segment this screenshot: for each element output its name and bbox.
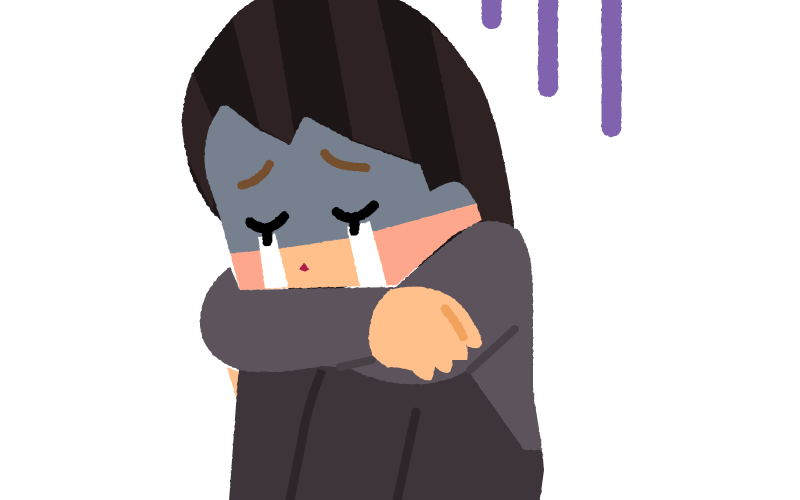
skin [230,203,482,290]
sweater fold [340,329,515,370]
illustration: crying woman hugging her knees [182,0,622,500]
eyebrows [242,153,366,185]
forehead [204,105,477,253]
mouth [299,263,309,272]
arm [200,267,480,384]
cheek left [230,248,265,290]
gloom lines [492,0,612,127]
finger line [445,309,463,337]
legs [228,340,544,500]
sweater shoulder [396,221,542,450]
leg creases [288,370,416,500]
hand [369,287,482,381]
tears [258,233,288,288]
face [204,105,482,290]
cheek right [373,204,482,285]
eyelashes [250,205,374,241]
hair [175,0,520,300]
foot [227,368,246,400]
